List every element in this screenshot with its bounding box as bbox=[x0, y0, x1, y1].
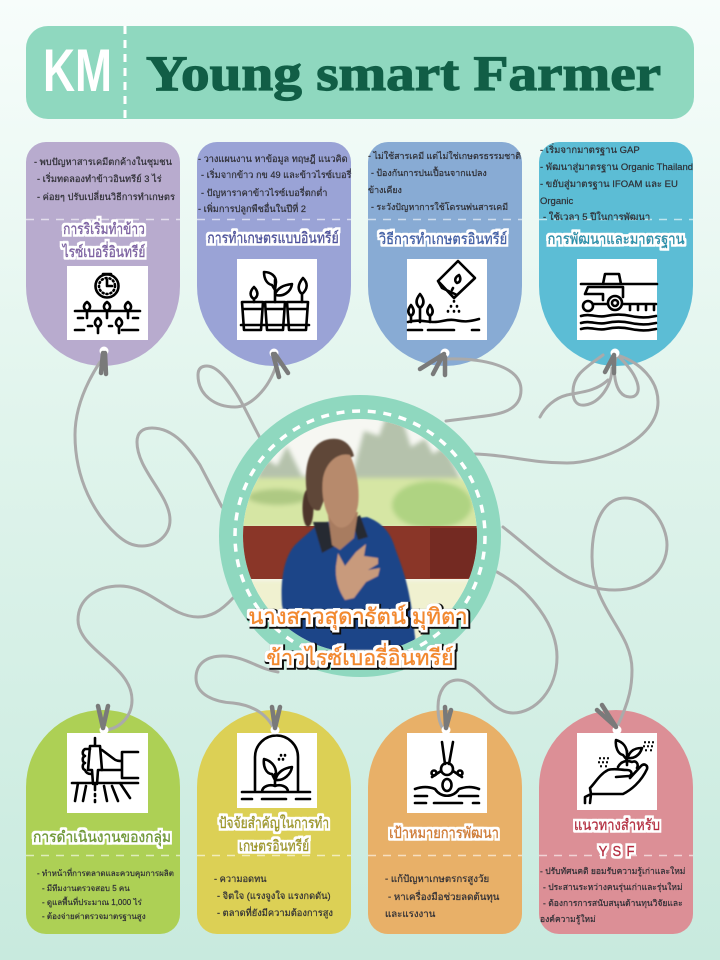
connecting strings bbox=[75, 355, 667, 732]
text block: - ปัญหาราคาข้าวไรซ์เบอรี่ตกต่ำ bbox=[201, 186, 327, 198]
panel: organic methods bbox=[368, 142, 522, 366]
icon: tractor bbox=[577, 259, 657, 340]
text block: - ประสานระหว่างคนรุ่นเก่าและรุ่นใหม่ bbox=[543, 882, 683, 893]
text block: - วางแผนงาน หาข้อมูล ทฤษฎี แนวคิด bbox=[198, 154, 348, 165]
text block: - พบปัญหาสารเคมีตกค้างในชุมชน bbox=[34, 156, 173, 168]
panel: guidance for YSF bbox=[539, 710, 693, 934]
text block: - ป้องกันการปนเปื้อนจากแปลง bbox=[371, 166, 487, 178]
text block: - หาเครื่องมือช่วยลดต้นทุน bbox=[388, 890, 500, 903]
heading: การทำเกษตรแบบอินทรีย์ bbox=[207, 229, 339, 246]
name caption: นางสาวสุดารัตน์ มุทิตา bbox=[248, 604, 468, 630]
banner tag: KM: KM bbox=[43, 38, 112, 105]
text block: - ไม่ใช้สารเคมี แต่ไม่ใช่เกษตรธรรมชาติ bbox=[368, 151, 521, 161]
text block: - จิตใจ (แรงจูงใจ แรงกดดัน) bbox=[217, 890, 331, 902]
neck bbox=[328, 512, 358, 550]
heading: Y S F bbox=[599, 842, 635, 859]
title: Young smart Farmer bbox=[146, 45, 661, 101]
panel: group operations bbox=[26, 710, 180, 934]
portrait ring bbox=[219, 395, 501, 677]
hand bbox=[336, 544, 380, 600]
ponytail bbox=[302, 489, 314, 527]
text block: - เริ่มทดลองทำข้าวอินทรีย์ 3 ไร่ bbox=[37, 172, 162, 184]
heading: วิธีการทำเกษตรอินทรีย์ bbox=[379, 230, 507, 247]
heading: การดำเนินงานของกลุ่ม bbox=[33, 830, 171, 846]
icon: potted plants bbox=[237, 259, 317, 340]
heading: การริเริ่มทำข้าว bbox=[63, 219, 145, 237]
text block: - ตลาดที่ยังมีความต้องการสูง bbox=[217, 906, 333, 919]
heading: ปัจจัยสำคัญในการทำ bbox=[219, 814, 329, 831]
text block: - ทำหน้าที่การตลาดและควบคุมการผลิต bbox=[37, 867, 174, 878]
text block: - ขยับสู่มาตรฐาน IFOAM และ EU bbox=[540, 179, 678, 190]
heading: การพัฒนาและมาตรฐาน bbox=[547, 230, 685, 248]
panel: key factors bbox=[197, 710, 351, 934]
panel: organic farming bbox=[197, 142, 352, 366]
text block: - ใช้เวลา 5 ปีในการพัฒนา bbox=[543, 211, 650, 223]
text block: - เริ่มจากข้าว กข 49 และข้าวไรซ์เบอรี่ bbox=[201, 168, 352, 180]
text block: - ปรับทัศนคติ ยอมรับความรู้เก่าและใหม่ bbox=[540, 866, 685, 877]
text block: ข้างเคียง bbox=[368, 185, 402, 195]
name caption: ข้าวไรซ์เบอรี่อินทรีย์ bbox=[266, 643, 454, 670]
text block: - ระวังปัญหาการใช้โดรนพ่นสารเคมี bbox=[371, 202, 508, 212]
icon: seed in soil bbox=[407, 733, 487, 813]
icon: hand holding seedling bbox=[577, 733, 657, 810]
text block: - ความอดทน bbox=[214, 874, 267, 884]
text block: และแรงงาน bbox=[385, 909, 436, 920]
icon: clock and sprouts bbox=[67, 266, 148, 340]
panel: development goals bbox=[368, 710, 522, 934]
text block: - ดูแลพื้นที่ประมาณ 1,000 ไร่ bbox=[42, 896, 143, 908]
name caption bbox=[248, 604, 468, 670]
text block: Organic bbox=[540, 196, 574, 207]
hair bbox=[306, 439, 354, 511]
heading: แนวทางสำหรับ bbox=[574, 816, 660, 833]
icon: hand with planting tool bbox=[67, 733, 148, 813]
heading: เป้าหมายการพัฒนา bbox=[389, 824, 499, 841]
collar bbox=[313, 515, 368, 553]
text block: - เพิ่มการปลูกพืชอื่นในปีที่ 2 bbox=[198, 202, 306, 215]
heading: ไรซ์เบอรี่อินทรีย์ bbox=[62, 242, 145, 260]
text block: - ต้องการการสนับสนุนด้านทุนวิจัยและ bbox=[543, 898, 683, 909]
heading: เกษตรอินทรีย์ bbox=[239, 837, 309, 854]
text block: - มีทีมงานตรวจสอบ 5 คน bbox=[42, 884, 130, 893]
text block: - ค่อยๆ ปรับเปลี่ยนวิธีการทำเกษตร bbox=[37, 190, 175, 202]
icon: plant under dome bbox=[237, 733, 317, 808]
face bbox=[322, 454, 359, 528]
panel: starting organic riceberry bbox=[26, 142, 180, 366]
text block: - พัฒนาสู่มาตรฐาน Organic Thailand bbox=[540, 162, 693, 173]
text block: องค์ความรู้ใหม่ bbox=[540, 914, 596, 925]
icon: seeds and sowing bbox=[407, 259, 487, 340]
title banner bbox=[26, 26, 694, 119]
portrait photo bbox=[240, 414, 480, 660]
panel: development and standards bbox=[539, 142, 693, 366]
text block: - เริ่มจากมาตรฐาน GAP bbox=[540, 143, 640, 156]
pins bbox=[98, 346, 622, 734]
text block: - ต้องจ่ายค่าตรวจมาตรฐานสูง bbox=[42, 912, 146, 922]
shoulders and shirt bbox=[282, 517, 416, 650]
text block: - แก้ปัญหาเกษตรกรสูงวัย bbox=[385, 874, 489, 885]
